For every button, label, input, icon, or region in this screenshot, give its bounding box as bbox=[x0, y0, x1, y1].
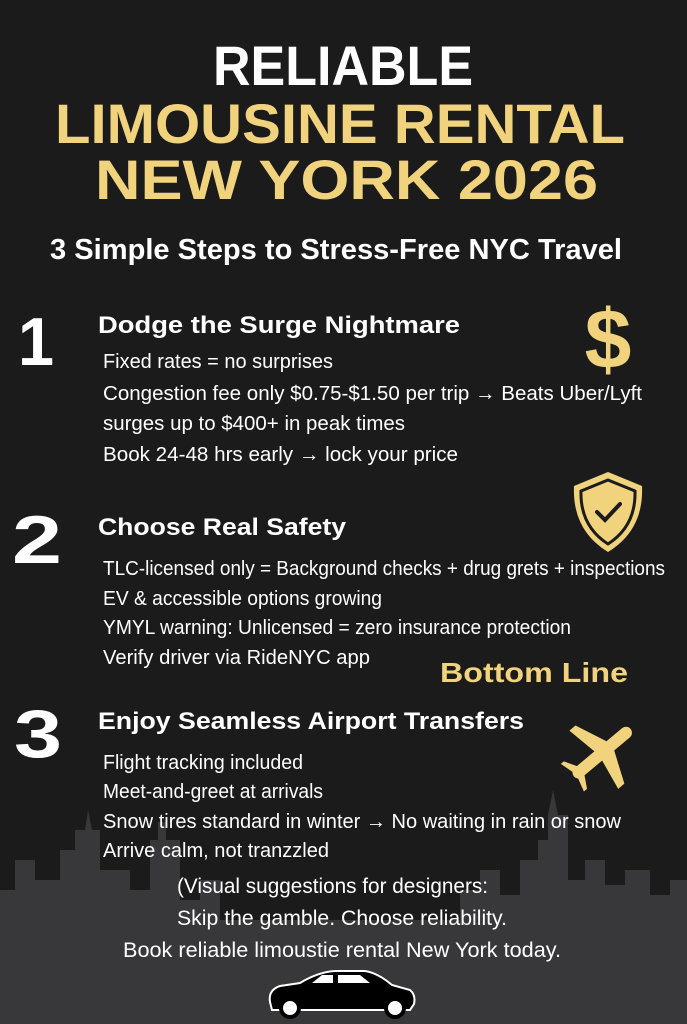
title: LIMOUSINE RENTAL bbox=[55, 92, 625, 155]
subtitle: 3 Simple Steps to Stress-Free NYC Travel bbox=[50, 234, 622, 266]
bottom line label: Bottom Line bbox=[440, 657, 628, 688]
icon: airplane bbox=[548, 700, 655, 807]
body 1: Fixed rates = no surprises bbox=[103, 351, 333, 373]
closing text: Skip the gamble. Choose reliability. bbox=[177, 907, 507, 930]
number 2: 2 bbox=[12, 502, 62, 578]
closing text: Book reliable limoustie rental New York today. bbox=[123, 939, 561, 962]
step 2 bbox=[12, 502, 665, 669]
icon: dollar sign: $ bbox=[585, 292, 631, 386]
body 2: YMYL warning: Unlicensed = zero insurance protection bbox=[103, 617, 571, 639]
body 3: Meet-and-greet at arrivals bbox=[103, 781, 323, 803]
skyline background bbox=[0, 790, 687, 1024]
step 1 bbox=[18, 304, 642, 466]
body 1: Book 24-48 hrs early → lock your price bbox=[103, 444, 458, 466]
closing text: (Visual suggestions for designers: bbox=[177, 875, 488, 898]
title bbox=[55, 34, 625, 211]
heading 3: Enjoy Seamless Airport Transfers bbox=[98, 708, 524, 735]
body 3: Snow tires standard in winter → No waiting in rain or snow bbox=[103, 811, 622, 833]
body 1: surges up to $400+ in peak times bbox=[103, 413, 405, 435]
body 2: EV & accessible options growing bbox=[103, 588, 382, 610]
step 3 bbox=[14, 696, 622, 862]
heading 1: Dodge the Surge Nightmare bbox=[98, 312, 460, 339]
icon: shield bbox=[574, 472, 642, 552]
title: RELIABLE bbox=[213, 34, 473, 97]
title: NEW YORK 2026 bbox=[95, 148, 598, 211]
number 3: 3 bbox=[14, 696, 62, 772]
body 2: Verify driver via RideNYC app bbox=[103, 647, 370, 669]
body 1: Congestion fee only $0.75-$1.50 per trip → Beats Uber/Lyft bbox=[103, 383, 642, 405]
heading 2: Choose Real Safety bbox=[98, 514, 347, 541]
body 2: TLC-licensed only = Background checks + drug grets + inspections bbox=[103, 558, 665, 580]
body 1 bbox=[103, 351, 642, 466]
icon: car bbox=[270, 971, 414, 1017]
body 3: Arrive calm, not tranzzled bbox=[103, 840, 329, 862]
number 1: 1 bbox=[18, 304, 54, 380]
body 3 bbox=[103, 752, 622, 862]
body 3: Flight tracking included bbox=[103, 752, 303, 774]
body 2 bbox=[103, 558, 665, 669]
closing text bbox=[123, 875, 561, 962]
